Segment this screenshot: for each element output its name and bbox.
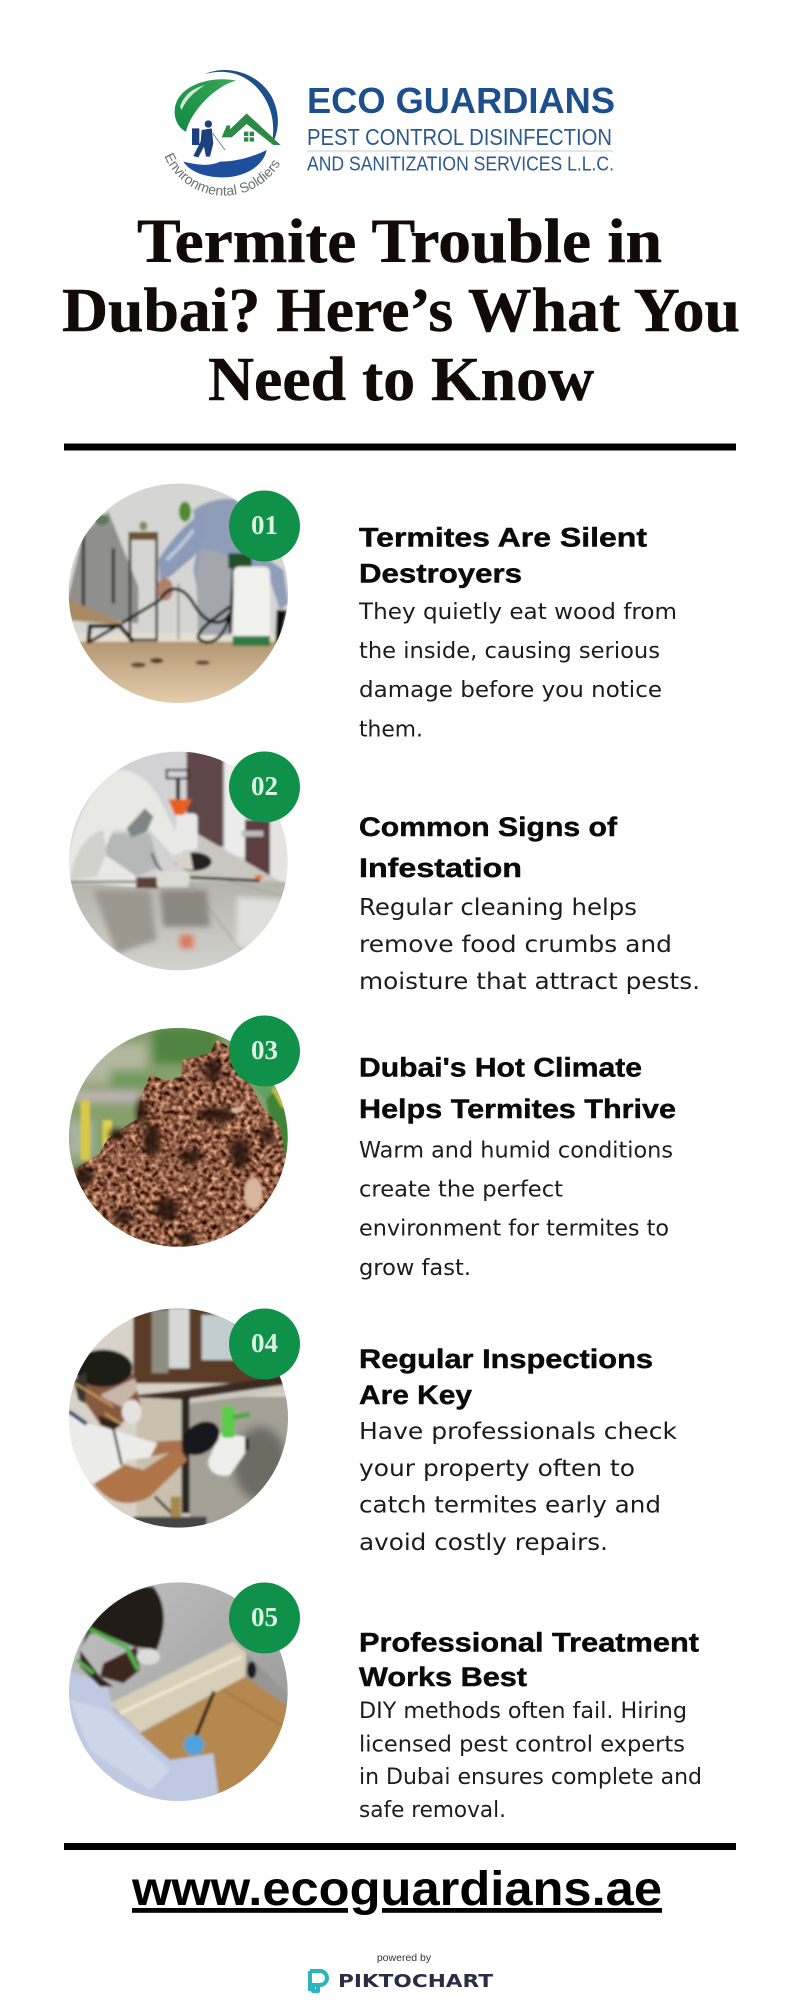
number badge 04 [229,1308,300,1380]
panel: item 03 [63,1016,676,1281]
body 03: environment for termites to [359,1216,669,1242]
logo emblem: Environmental Soldiers [164,152,280,196]
body 04: catch termites early and [359,1492,661,1518]
number badge 02: 02 [251,771,278,801]
logo emblem [164,70,281,196]
number badge 04: 04 [251,1328,278,1358]
body 02 [359,895,700,995]
body 01: damage before you notice [359,678,662,703]
number badge 03: 03 [251,1035,278,1065]
body 04 [359,1419,678,1556]
body 03 [359,1138,673,1281]
heading 05 [359,1628,699,1692]
photo: termite mound [69,1028,288,1247]
website link: www.ecoguardians.ae [131,1863,662,1916]
logo wordmark: PEST CONTROL DISINFECTION [307,124,612,150]
heading 05: Professional Treatment [359,1628,699,1658]
heading 05: Works Best [359,1662,527,1692]
panel: item 05 [63,1577,702,1823]
logo wordmark: ECO GUARDIANS [307,80,615,121]
number badge 03 [229,1016,300,1086]
body 05 [359,1699,702,1823]
body 03: create the perfect [359,1178,563,1202]
powered by Piktochart [310,1952,494,1992]
body 02: moisture that attract pests. [359,969,700,995]
body 01: They quietly eat wood from [358,600,677,625]
number badge 02 [229,752,300,822]
title: Dubai? Here’s What You [62,277,740,345]
body 01: them. [359,718,423,742]
floor reflection [93,890,283,953]
panel: item 04 [63,1303,678,1556]
number badge 01 [229,490,300,562]
number badge 01: 01 [251,510,278,540]
heading 04: Regular Inspections [359,1344,653,1374]
body 04: Have professionals check [359,1419,678,1445]
number badge 05 [229,1582,300,1654]
title [62,208,740,414]
title: Need to Know [208,346,594,414]
body 01 [358,600,677,742]
heading 02 [359,812,617,883]
heading 01 [359,522,647,588]
heading 04: Are Key [359,1380,472,1410]
heading 03: Dubai's Hot Climate [359,1052,642,1082]
photo: technician in white suit [69,752,288,970]
heading 02: Common Signs of [359,812,617,842]
title: Termite Trouble in [137,208,662,276]
logo: Eco Guardians [164,70,615,196]
body 03: Warm and humid conditions [359,1138,673,1164]
heading 04 [359,1344,653,1410]
body 05: safe removal. [359,1798,506,1823]
body 05: in Dubai ensures complete and [359,1765,702,1790]
body 03: grow fast. [359,1256,471,1281]
heading 03 [359,1052,676,1124]
logo wordmark [307,80,615,176]
body 05: licensed pest control experts [359,1732,685,1758]
panel: item 01 [63,480,677,742]
number badge 05: 05 [251,1602,278,1632]
body 02: Regular cleaning helps [359,895,637,921]
heading 01: Destroyers [359,558,522,588]
body 05: DIY methods often fail. Hiring [359,1699,687,1724]
powered by Piktochart: PIKTOCHART [338,1971,494,1992]
heading 01: Termites Are Silent [359,522,647,552]
icon: Piktochart mark [310,1971,327,1991]
panel: item 02 [63,747,700,995]
powered by Piktochart: powered by [377,1952,432,1964]
logo wordmark: AND SANITIZATION SERVICES L.L.C. [307,154,614,176]
photo: man spraying kitchen [68,1308,288,1528]
body 04: avoid costly repairs. [359,1530,608,1556]
photo: professional treating skirting [69,1582,288,1801]
photo: technician spraying floor [68,484,288,703]
body 04: your property often to [359,1456,635,1482]
body 01: the inside, causing serious [359,639,660,664]
heading 02: Infestation [359,853,522,883]
heading 03: Helps Termites Thrive [359,1094,676,1124]
body 02: remove food crumbs and [359,932,672,958]
